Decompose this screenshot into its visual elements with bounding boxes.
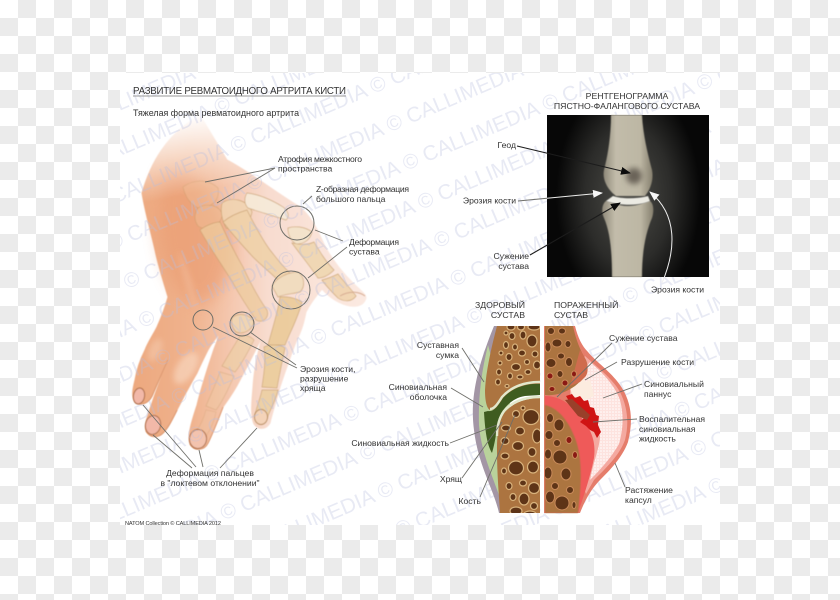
panel: X-ray of metacarpophalangeal joint: [547, 115, 709, 277]
illustration: rheumatoid hand: [132, 115, 366, 449]
subtitle: Тяжелая форма ревматоидного артрита: [133, 108, 299, 118]
white panel: [120, 73, 720, 525]
joint labels: синовиальная: [639, 424, 696, 434]
thumb tip contour: [340, 292, 365, 296]
watermark: © CALLIMEDIA © CALLIMEDIA © CALLIMEDIA: [88, 20, 510, 217]
carpal bones: [183, 181, 218, 208]
watermark: © CALLIMEDIA © CALLIMEDIA © CALLIMEDIA © CALLIMEDIA © CALLIMEDIA © CALLIMEDIA: [0, 18, 837, 392]
watermark: [120, 73, 720, 525]
circles marking joints: [193, 206, 314, 336]
geode: [626, 168, 642, 184]
capsule: [473, 326, 500, 513]
x-ray labels: Эрозия кости: [651, 284, 704, 294]
x-ray labels: Сужение: [494, 251, 529, 261]
watermark: © CALLIMEDIA © CALLIMEDIA © CALLIMEDIA © CALLIMEDIA © CALLIMEDIA: [61, 231, 763, 546]
middle finger metacarpal head with erosions: [232, 315, 254, 333]
synovial fluid: [484, 384, 540, 453]
upper bone: [604, 115, 653, 196]
x-ray labels: Геод: [498, 140, 516, 150]
joint labels: Синовиальная жидкость: [351, 438, 450, 448]
arrow: bone erosion right: [650, 192, 672, 283]
joint space: [606, 196, 650, 205]
central divider: [540, 322, 544, 514]
arrow: bone erosion left: [518, 193, 602, 201]
nails: [132, 387, 268, 449]
hand labels: Деформация пальцев: [166, 468, 254, 478]
lower diseased bone: [545, 405, 581, 513]
bone pores: upper: [496, 324, 540, 388]
x-ray labels: Эрозия кости: [463, 196, 516, 206]
hand labels: Деформация: [349, 237, 399, 247]
joint labels: Сужение сустава: [609, 333, 678, 343]
hand labels: Z-образная деформация: [316, 184, 409, 194]
copyright line: NATOM Collection © CALLIMEDIA 2012: [125, 520, 221, 527]
x-ray labels: ПЯСТНО-ФАЛАНГОВОГО СУСТАВА: [554, 101, 700, 111]
joint labels: Хрящ: [440, 474, 462, 484]
x-ray labels: сустава: [498, 261, 529, 271]
panel: healthy joint: [473, 324, 542, 517]
joint labels: оболочка: [410, 392, 447, 402]
hand labels: Эрозия кости,: [300, 364, 355, 374]
lower bone: [602, 201, 653, 277]
hand labels: [160, 154, 409, 488]
title: РАЗВИТИЕ РЕВМАТОИДНОГО АРТРИТА КИСТИ: [133, 86, 346, 97]
joint labels: Синовиальная: [389, 382, 447, 392]
hand labels: Атрофия межкостного: [278, 154, 362, 164]
joint labels: Разрушение кости: [621, 357, 694, 367]
watermark: © CALLIMEDIA © CALLIMEDIA © CALLIMEDIA © CALLIMEDIA © CALLIMEDIA: [77, 269, 779, 585]
bones: [183, 181, 356, 436]
joint labels: СУСТАВ: [554, 310, 588, 320]
bone pores: lower: [501, 406, 542, 517]
joint labels: Синовиальный: [644, 379, 704, 389]
finger contour shading: [135, 360, 223, 449]
watermark: © CALLIMEDIA © CALLIMEDIA © CALLIMEDIA: [408, 384, 831, 580]
x-ray labels: [463, 91, 704, 294]
watermark: © CALLIMEDIA © CALLIMEDIA © CALLIMEDIA: [392, 345, 815, 542]
joint labels: сумка: [436, 350, 459, 360]
watermark: © CALLIMEDIA © CALLIMEDIA © CALLIMEDIA © CALLIMEDIA © CALLIMEDIA: [12, 115, 714, 431]
joint labels: СУСТАВ: [491, 310, 525, 320]
thumb metacarpal: [245, 193, 288, 220]
leader lines: [143, 168, 642, 497]
watermark: © CALLIMEDIA © CALLIMEDIA © CALLIMEDIA © CALLIMEDIA: [120, 38, 683, 294]
joint labels: ЗДОРОВЫЙ: [475, 299, 525, 310]
watermark: © CALLIMEDIA © CALLIMEDIA © CALLIMEDIA © CALLIMEDIA © CALLIMEDIA: [28, 154, 730, 469]
pannus: [572, 362, 623, 480]
palm warm shading: [159, 170, 231, 305]
bones: [485, 326, 540, 410]
hand labels: большого пальца: [316, 194, 386, 204]
arrows on x-ray: [517, 146, 672, 283]
joint labels: Кость: [458, 496, 482, 506]
arrow: geode: [517, 146, 630, 173]
third metacarpal: [200, 222, 268, 321]
index middle phalanx: [262, 345, 285, 388]
stretched capsule: [544, 326, 631, 513]
joint labels: Суставная: [417, 340, 459, 350]
destroyed bone cream patch: [570, 376, 594, 400]
hand labels: разрушение: [300, 374, 349, 384]
panel: affected joint: [540, 322, 631, 514]
pores: lower: [544, 414, 578, 510]
joint labels: паннус: [644, 389, 672, 399]
upper diseased bone: [545, 326, 587, 395]
index distal phalanx: [255, 390, 278, 419]
hand labels: сустава: [349, 246, 380, 256]
hand labels: хряща: [300, 383, 326, 393]
watermark: © CALLIMEDIA © CALLIMEDIA: [71, 41, 355, 178]
x-ray background: [547, 115, 709, 277]
arrow: narrowing: [530, 203, 620, 255]
red inflamed surface: [545, 396, 594, 513]
joint labels: ПОРАЖЕННЫЙ: [554, 299, 618, 310]
joint labels: жидкость: [639, 434, 676, 444]
index metacarpal head: [272, 272, 304, 297]
finger highlights: [147, 260, 200, 386]
joint labels: [351, 299, 705, 506]
x-ray labels: РЕНТГЕНОГРАММА: [586, 91, 669, 101]
synovium and cartilage: [479, 345, 510, 495]
hand labels: в "локтевом отклонении": [160, 478, 260, 488]
thumb phalanges: [288, 227, 312, 244]
hand labels: пространства: [278, 164, 332, 174]
index proximal phalanx: [268, 297, 302, 345]
pores: upper: [545, 328, 576, 392]
watermark: © CALLIMEDIA © CALLIMEDIA © CALLIMEDIA © CALLIMEDIA: [234, 307, 797, 563]
middle finger phalanges: [222, 335, 254, 372]
eroded bone wedge: [565, 399, 590, 420]
watermark: © CALLIMEDIA © CALLIMEDIA © CALLIMEDIA: [104, 59, 527, 255]
inflammatory fluid: [566, 394, 601, 438]
hand: skin silhouette: [133, 115, 366, 449]
fourth metacarpal: [223, 210, 290, 282]
joint labels: Воспалительная: [639, 414, 705, 424]
joint labels: капсул: [625, 495, 652, 505]
watermark: © CALLIMEDIA: [55, 62, 199, 140]
joint labels: Растяжение: [625, 485, 673, 495]
watermark: © CALLIMEDIA © CALLIMEDIA © CALLIMEDIA © CALLIMEDIA © CALLIMEDIA: [45, 192, 747, 508]
